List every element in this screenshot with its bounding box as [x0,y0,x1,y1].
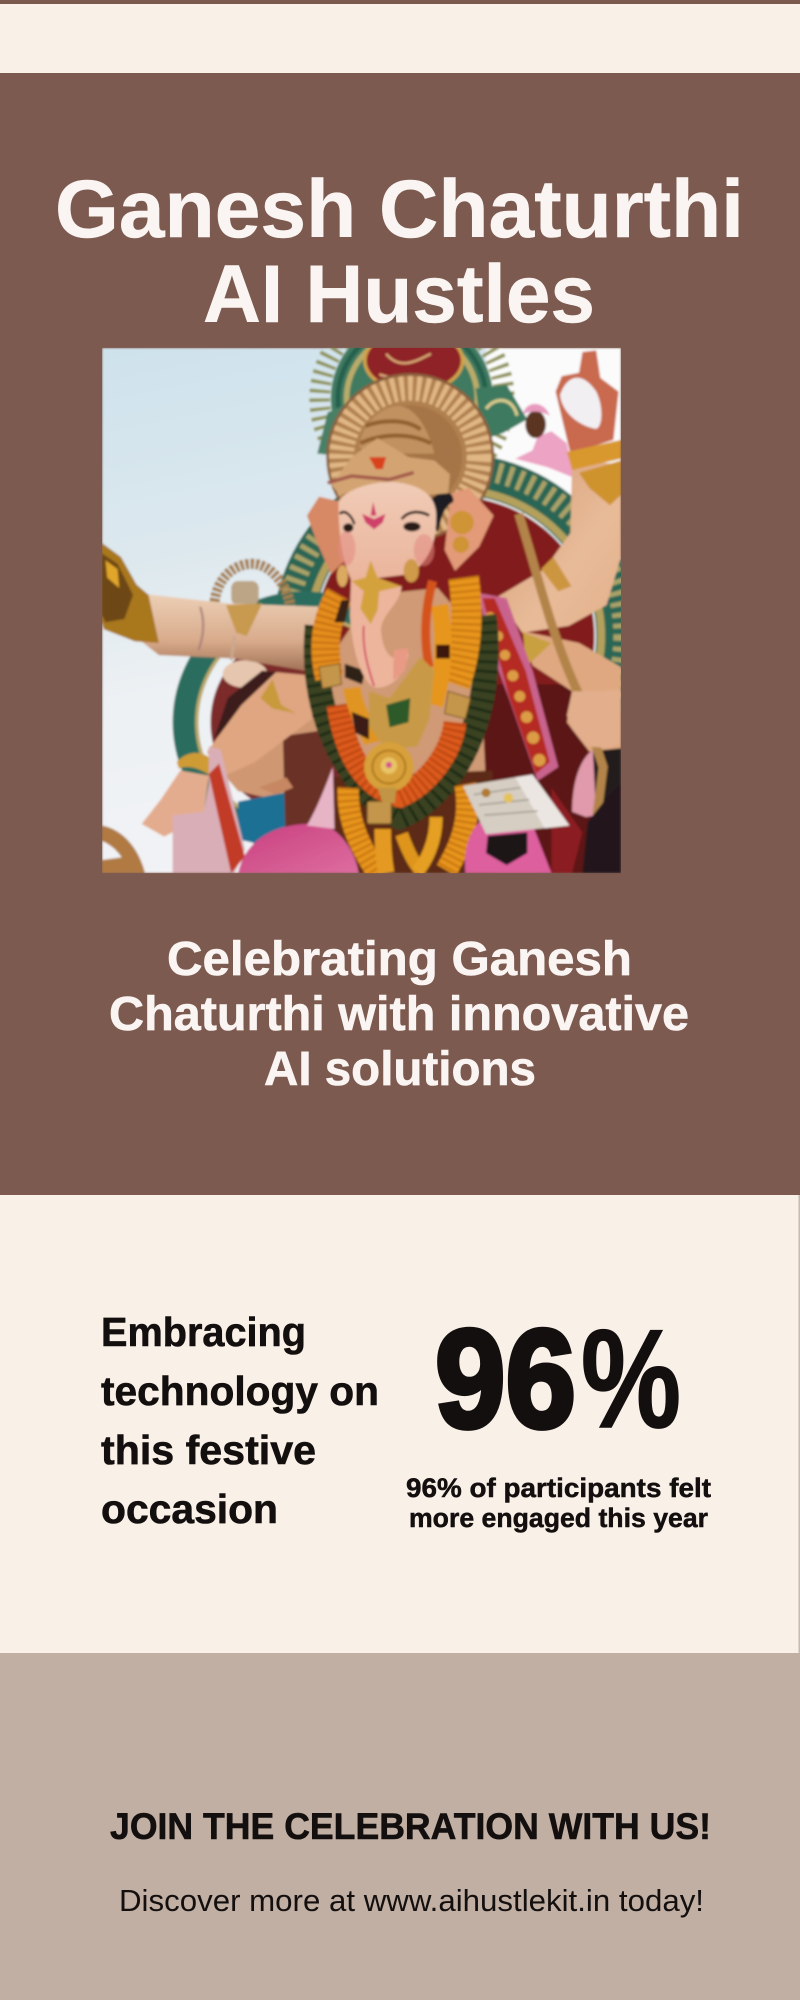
subheading [109,933,689,1096]
panel: call to action [0,1653,800,2000]
person in pink [515,404,574,478]
right upper arm [498,461,621,633]
statement text: Embracing [101,1309,306,1355]
panel: top cream band [0,4,800,73]
ear left [307,497,345,574]
call to action heading: JOIN THE CELEBRATION WITH US! [110,1806,711,1847]
sky background [102,348,621,873]
big number: % [581,1300,681,1457]
subheading: Celebrating Ganesh [167,933,632,986]
big number: 96 [435,1300,576,1457]
right hand [567,690,621,748]
statement text: this festive [101,1427,316,1473]
small lower-left arch [171,557,352,844]
mace handle [519,514,603,822]
panel: statistic [0,1195,800,1653]
website line: Discover more at www.aihustlekit.in today! [119,1883,704,1918]
left raised arm [102,543,328,672]
stat caption [406,1473,711,1533]
crown halo [328,374,493,540]
medallion [364,742,414,803]
garlands [316,578,486,873]
photo: Ganesha idol [102,306,624,873]
trunk [337,559,419,688]
statement text [101,1309,379,1532]
stat caption: 96% of participants felt [406,1473,711,1503]
stat caption: more engaged this year [409,1503,708,1533]
right lower arm [522,631,621,752]
title: AI Hustles [203,249,595,340]
goddess figure [214,658,332,844]
raised hand with shell [541,350,621,591]
title [55,164,744,340]
statement text: technology on [101,1368,379,1414]
pink dhoti [238,750,596,873]
dark lower-right corner [582,802,620,873]
torso and lower shadow [317,588,493,873]
panel: hero [0,73,800,1195]
subheading: AI solutions [264,1043,536,1096]
head crown [328,406,450,495]
face and eyes [338,482,436,581]
top stripe [0,0,800,4]
left lower arm and hand [142,672,314,837]
statement text: occasion [101,1486,278,1532]
puja tray [463,775,569,865]
big number [435,1300,681,1457]
title: Ganesh Chaturthi [55,164,744,255]
central necklace [334,600,450,750]
back aureole top [308,348,528,460]
back aureole right [286,467,624,873]
gold cylinders [319,664,471,824]
right sash [479,593,558,781]
ear right [429,488,494,571]
bottom-left gold arch [102,826,145,873]
subheading: Chaturthi with innovative [109,988,689,1041]
left sash [173,746,245,873]
